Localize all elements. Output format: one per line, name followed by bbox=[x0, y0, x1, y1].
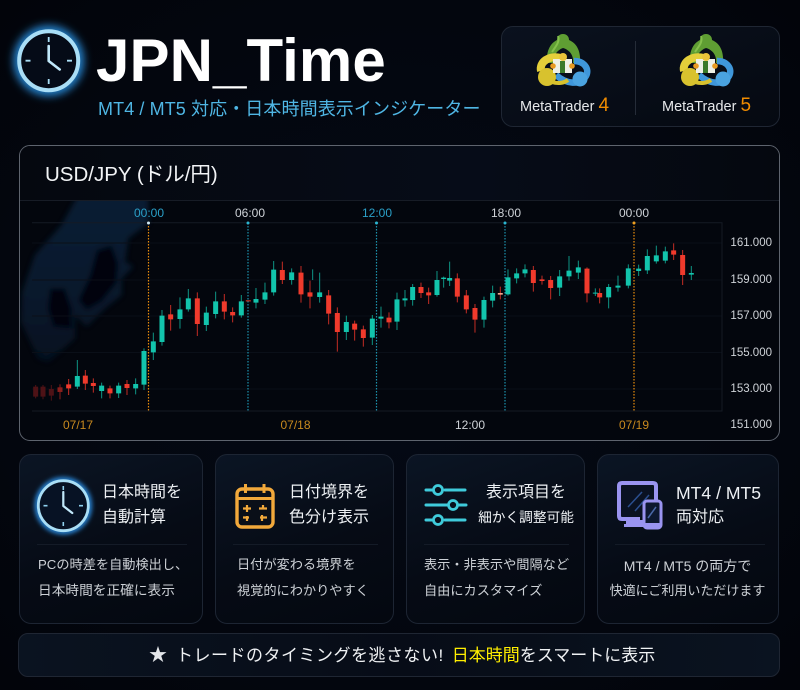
candles right section bbox=[525, 243, 691, 308]
card title: 日付境界を bbox=[289, 484, 369, 501]
card description bbox=[38, 557, 188, 598]
card description: 日付が変わる境界を bbox=[237, 557, 356, 572]
date axis labels bbox=[63, 418, 649, 432]
candles middle section bbox=[274, 261, 517, 352]
icon: clock bbox=[31, 474, 96, 538]
price axis labels: 151.000 bbox=[730, 419, 772, 431]
card title: 自動計算 bbox=[102, 509, 166, 526]
label: MetaTrader 4: MetaTrader 4 bbox=[520, 95, 609, 116]
card title: 色分け表示 bbox=[289, 509, 369, 526]
price axis labels: 153.000 bbox=[730, 383, 772, 395]
card description bbox=[610, 558, 765, 598]
card description: 表示・非表示や間隔など bbox=[424, 557, 569, 572]
card description: PCの時差を自動検出し、 bbox=[38, 557, 188, 572]
icon: MetaTrader 4 logo bbox=[536, 34, 590, 86]
card description: 自由にカスタマイズ bbox=[424, 583, 542, 598]
panel: USD/JPY chart bbox=[19, 145, 780, 441]
date axis labels: 12:00 bbox=[455, 418, 485, 432]
title: JPN_Time bbox=[96, 27, 386, 94]
icon: monitor and phone bbox=[617, 481, 662, 530]
price axis labels: 161.000 bbox=[730, 237, 772, 249]
price axis labels bbox=[730, 237, 772, 431]
plot frame bbox=[32, 223, 722, 411]
date axis labels: 07/19 bbox=[619, 418, 649, 432]
card title bbox=[289, 483, 369, 526]
icon: sliders bbox=[424, 484, 468, 526]
time axis labels: 06:00 bbox=[235, 206, 265, 220]
card description: 快適にご利用いただけます bbox=[610, 583, 765, 598]
time axis labels bbox=[134, 206, 649, 220]
chart heading: USD/JPY (ドル/円) bbox=[45, 163, 218, 186]
price axis labels: 159.000 bbox=[730, 274, 772, 286]
boundary markers bbox=[147, 222, 636, 224]
date axis labels: 07/17 bbox=[63, 418, 93, 432]
card title bbox=[676, 483, 761, 526]
label: MetaTrader 5: MetaTrader 5 bbox=[662, 95, 751, 116]
price axis labels: 157.000 bbox=[730, 310, 772, 322]
card description: MT4 / MT5 の両方で bbox=[624, 558, 751, 574]
icon: calendar bbox=[235, 484, 275, 529]
panel: auto calculation bbox=[19, 454, 203, 624]
panel: MT4 and MT5 support bbox=[597, 454, 779, 624]
card title bbox=[478, 484, 574, 525]
card description: 日本時間を正確に表示 bbox=[38, 583, 175, 598]
icon: glowing clock bbox=[7, 19, 90, 102]
card title: MT4 / MT5 bbox=[676, 483, 761, 503]
time boundary lines bbox=[148, 223, 634, 411]
card description: 視覚的にわかりやすく bbox=[237, 583, 369, 598]
subtitle: MT4 / MT5 対応・日本時間表示インジケーター bbox=[98, 99, 481, 119]
time axis labels: 18:00 bbox=[491, 206, 521, 220]
candles left section bbox=[36, 283, 265, 401]
card title: 日本時間を bbox=[102, 484, 182, 501]
map: Japan background bbox=[20, 201, 150, 361]
icon: MetaTrader 5 logo bbox=[680, 34, 734, 86]
panel: date boundary bbox=[215, 454, 394, 624]
date axis labels: 07/18 bbox=[280, 418, 311, 432]
panel: MetaTrader platforms bbox=[501, 26, 780, 127]
time axis labels: 12:00 bbox=[362, 206, 392, 220]
callout: bottom banner bbox=[18, 633, 780, 677]
card description bbox=[237, 557, 369, 598]
time axis labels: 00:00 bbox=[134, 206, 164, 220]
card title bbox=[102, 484, 182, 526]
time axis labels: 00:00 bbox=[619, 206, 649, 220]
panel: display settings bbox=[406, 454, 585, 624]
banner text: ★ トレードのタイミングを逃さない! 日本時間をスマートに表示 bbox=[149, 645, 655, 665]
price axis labels: 155.000 bbox=[730, 346, 772, 358]
card description bbox=[424, 557, 569, 598]
card title: 両対応 bbox=[676, 509, 724, 526]
card title: 細かく調整可能 bbox=[478, 510, 574, 525]
card title: 表示項目を bbox=[486, 484, 566, 501]
